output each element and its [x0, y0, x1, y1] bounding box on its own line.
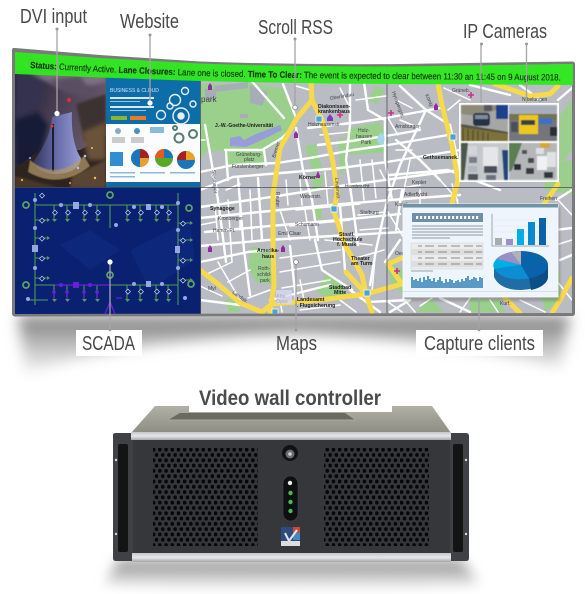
map labels: haus: [262, 254, 274, 260]
label: Capture clients: [416, 298, 543, 356]
scrolling RSS band: Status: Currently Active. Lane Closures: Lane one is closed. Time To Clear: The event is expected to clear between 11:30 an 11:45 on 9 August 2018.: [30, 62, 560, 82]
left handle: [113, 433, 133, 561]
capture client title bar: [412, 213, 483, 222]
map labels: Kepler: [412, 180, 427, 186]
right handle: [450, 433, 469, 561]
camera 2: [509, 105, 557, 141]
map labels: Staatl.: [339, 232, 355, 238]
front panel: [133, 440, 450, 553]
label: IP Cameras: [463, 21, 547, 103]
SCADA nodes: [26, 198, 187, 301]
map grey buildings: [205, 82, 268, 118]
wall frame: [12, 48, 575, 317]
label: Website: [120, 11, 179, 106]
panel: SCADA: [15, 187, 201, 315]
map labels: Weberstr.: [300, 194, 321, 200]
video wall controller chassis: [113, 406, 469, 562]
panel: website: [106, 70, 200, 187]
map labels: Kronberger: [218, 216, 243, 222]
map POI icons: [208, 83, 474, 314]
map labels: Kurf.: [500, 301, 511, 307]
map labels: König: [423, 93, 434, 108]
SCADA open switches: [40, 193, 185, 294]
map labels: hausen: [356, 134, 373, 140]
controller shadow: [104, 560, 480, 590]
map labels: krankenhaus: [318, 109, 350, 115]
label: Scroll RSS: [258, 17, 333, 110]
label: Capture clients: Capture clients: [424, 333, 535, 355]
map labels: Emil Claar: [278, 231, 301, 237]
map labels: Stadtbad: [329, 285, 351, 291]
map labels: Arnsburger: [395, 124, 420, 130]
panel: website: BUSINESS & CLOUD: [110, 88, 159, 94]
map labels: schild-: [257, 272, 272, 278]
map labels: Myl: [208, 286, 216, 292]
right grille: [324, 448, 429, 546]
map labels: Grüneburg-: [236, 152, 262, 158]
label: SCADA: [76, 259, 142, 356]
map labels: Stalburg: [360, 210, 379, 216]
label: IP Cameras: IP Cameras: [463, 21, 547, 43]
panel: IP cameras: [459, 103, 559, 182]
map labels: Synagoge: [210, 206, 235, 212]
map labels: Theater: [351, 256, 370, 262]
screen content: [15, 60, 572, 316]
map labels: park: [260, 278, 270, 284]
status LEDs: [283, 476, 298, 521]
map labels: Reuter: [274, 192, 280, 207]
map labels: Oeder: [395, 251, 409, 257]
label: Maps: Maps: [276, 333, 317, 355]
capture client bar chart: [492, 214, 549, 246]
video wall: [12, 48, 575, 316]
map labels: Hynspergstr.: [390, 91, 405, 119]
screen grid lines: [15, 64, 572, 314]
map labels: Humbracht: [345, 184, 370, 190]
left grille: [153, 448, 258, 546]
cooling tower: [33, 112, 81, 174]
map labels: Lindenstr.: [333, 178, 341, 200]
map labels: Landesamt: [297, 297, 325, 303]
logo badge: [281, 527, 300, 546]
map labels: Siesmayer: [210, 170, 218, 194]
pie charts: [131, 149, 195, 169]
map labels: Oper: [276, 299, 288, 305]
map labels: Holzhausenstr.: [308, 122, 341, 128]
capture client table: [411, 243, 483, 269]
map labels: f. Flugsicherung: [295, 303, 335, 309]
panel: capture client: [403, 204, 560, 301]
SCADA bus lines: [30, 193, 191, 305]
map background: [200, 60, 572, 316]
camera 1: [461, 105, 508, 141]
map white streets: [200, 78, 572, 312]
map labels: Amerika-: [257, 248, 279, 254]
map labels: Hochschule: [333, 237, 363, 243]
map labels: Mitte: [334, 290, 346, 296]
panel: DVI input photo: [15, 70, 106, 188]
map labels: Diakonissen-: [318, 104, 351, 110]
map labels: Nibelungen: [522, 97, 548, 103]
key lock: [282, 445, 298, 461]
map labels: Holz-: [358, 128, 370, 134]
label: DVI input: [20, 6, 87, 116]
map labels: Freiherr: [540, 196, 558, 202]
label: Maps: [276, 260, 317, 355]
map labels: [201, 88, 558, 309]
heading: Video wall controller: [199, 387, 381, 410]
map yellow main roads: [200, 82, 572, 313]
map labels: f. Musik: [337, 242, 356, 248]
map labels: Adlerflycht: [404, 192, 428, 198]
wall shadow: [18, 316, 570, 374]
map labels: Hamm-Pl.: [213, 228, 235, 234]
SCADA purple section: [54, 285, 122, 314]
map labels: Körner: [299, 175, 316, 181]
university building: [230, 125, 282, 147]
label: Scroll RSS: Scroll RSS: [258, 17, 333, 39]
map labels: Schumann: [295, 222, 319, 228]
map labels: platz: [244, 157, 255, 163]
map labels: park: [201, 95, 218, 104]
bottom silver bar: [132, 553, 451, 562]
map labels: Oberlindau: [329, 92, 355, 102]
capture client pie chart: [493, 251, 548, 290]
scrolling RSS band: [15, 52, 573, 85]
map labels: Roth-: [258, 266, 271, 272]
map labels: Grüneb.: [452, 88, 470, 94]
map labels: Kasal: [395, 202, 408, 208]
map labels: Park: [361, 140, 372, 146]
label: SCADA: SCADA: [82, 333, 136, 355]
map labels: Bremer: [271, 141, 282, 159]
map parks: [200, 84, 572, 312]
camera 3: [461, 143, 508, 180]
camera 4: [509, 143, 557, 180]
label: Website: Website: [120, 11, 179, 33]
top silver bar: [131, 432, 451, 440]
capture client spectrum chart: [411, 271, 482, 288]
map labels: Alte: [276, 294, 286, 300]
capture client text lines: [412, 226, 483, 238]
label: DVI input: DVI input: [20, 6, 87, 28]
map labels: am Turm: [351, 261, 373, 267]
chassis top: [131, 406, 451, 433]
map labels: Landstr.: [231, 290, 249, 305]
heading: [189, 380, 392, 412]
map labels: Gethsemanek.: [423, 155, 459, 161]
map labels: Fürstenberger: [232, 164, 264, 170]
map labels: J.-W.-Goethe-Universität: [215, 123, 273, 129]
